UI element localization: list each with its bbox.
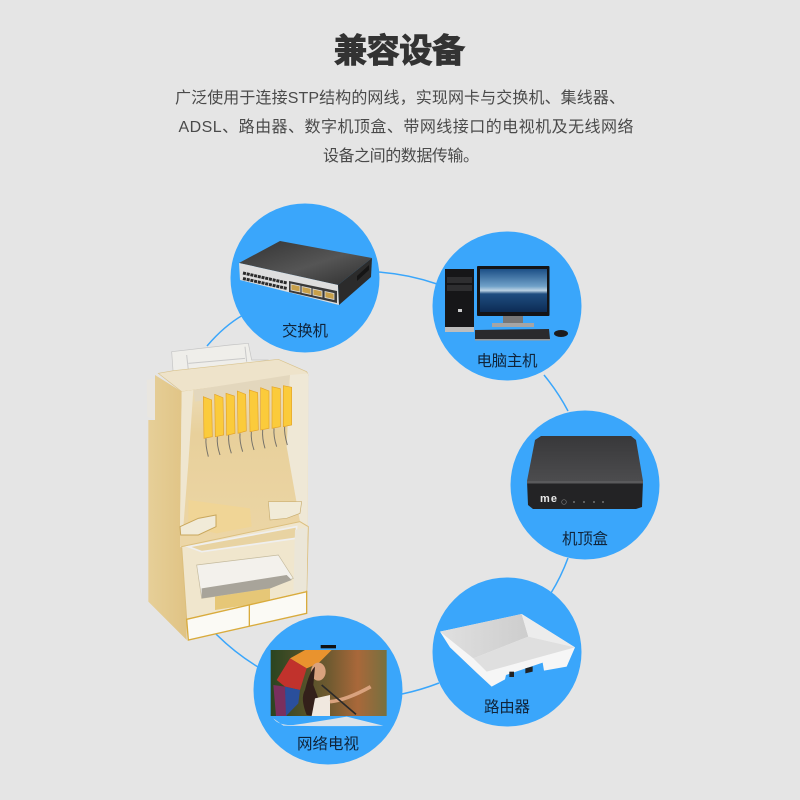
panel: network TV xyxy=(254,616,402,764)
label: 路由器 xyxy=(484,698,530,716)
icon: router xyxy=(440,614,575,687)
icon: set-top box xyxy=(527,436,643,509)
label: 机顶盒 xyxy=(562,530,608,548)
panel: computer xyxy=(432,232,582,380)
title: 兼容设备 xyxy=(334,32,465,69)
cable clip xyxy=(197,555,293,598)
translucent front housing xyxy=(180,373,308,547)
white gold-edged end strips xyxy=(187,592,307,640)
icon: television xyxy=(271,645,387,726)
icon: RJ45 gold shielded connector xyxy=(147,343,308,640)
icon: set-top box: me xyxy=(540,493,557,505)
description text xyxy=(175,89,634,165)
description text: 设备之间的数据传输。 xyxy=(323,147,479,165)
panel: router xyxy=(432,578,582,726)
description text: ADSL、路由器、数字机顶盒、带网线接口的电视机及无线网络 xyxy=(178,117,634,136)
label: 网络电视 xyxy=(297,735,359,753)
description text: 广泛使用于连接STP结构的网线，实现网卡与交换机、集线器、 xyxy=(175,89,625,107)
panel: set-top box xyxy=(510,410,660,560)
connecting arcs xyxy=(207,272,568,694)
icon: network switch xyxy=(239,241,372,305)
label: 电脑主机 xyxy=(476,352,538,370)
wires xyxy=(206,427,287,457)
panel: switch xyxy=(230,204,380,352)
yellow contacts xyxy=(203,386,292,438)
clear upper housing xyxy=(158,359,308,392)
icon: desktop computer xyxy=(445,266,568,340)
clear top latch xyxy=(172,343,270,375)
label: 交换机 xyxy=(282,322,328,340)
gold side shield xyxy=(148,375,187,640)
lower housing band xyxy=(182,522,308,619)
